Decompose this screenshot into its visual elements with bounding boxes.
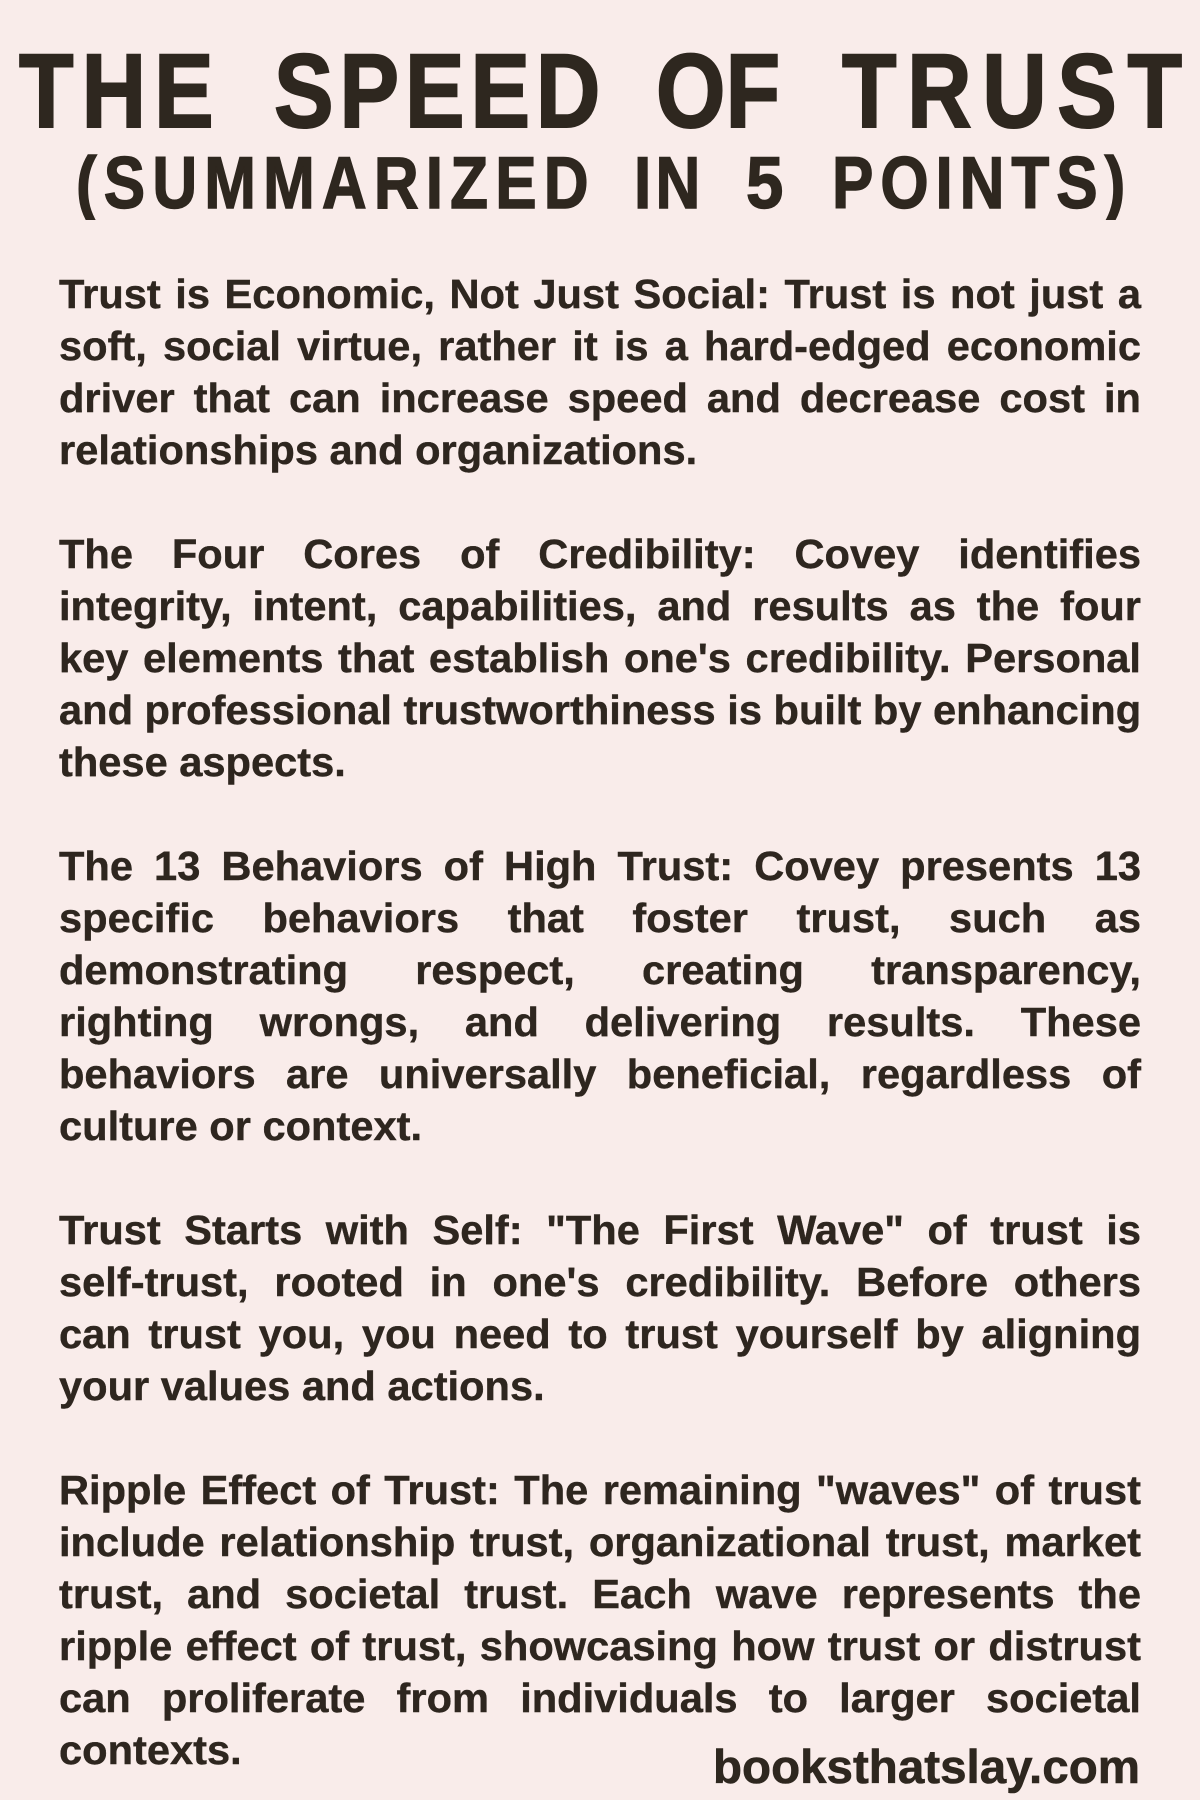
point 4: trust starts with self: Trust Starts with Self: "The First Wave" of trust is xyxy=(59,1207,1141,1253)
point 1: trust is economic xyxy=(59,271,1142,473)
body text xyxy=(59,271,1142,1773)
title xyxy=(19,32,1182,135)
point 5: ripple effect of trust: can proliferate from individuals to larger societal xyxy=(59,1675,1141,1721)
point 2: four cores of credibility: integrity, intent, capabilities, and results as the four xyxy=(59,583,1141,629)
point 3: 13 behaviors of high trust: demonstrating respect, creating transparency, xyxy=(59,947,1141,993)
point 2: four cores of credibility: The Four Cores of Credibility: Covey identifies xyxy=(59,531,1141,577)
point 1: trust is economic: soft, social virtue, rather it is a hard-edged economic xyxy=(59,323,1141,369)
subtitle xyxy=(76,142,1125,220)
point 5: ripple effect of trust: include relationship trust, organizational trust, market xyxy=(59,1519,1141,1565)
point 3: 13 behaviors of high trust: specific behaviors that foster trust, such as xyxy=(59,895,1141,941)
point 3: 13 behaviors of high trust: behaviors are universally beneficial, regardless of xyxy=(59,1051,1141,1097)
point 1: trust is economic: Trust is Economic, Not Just Social: Trust is not just a xyxy=(59,271,1141,317)
website credit: booksthatslay.com xyxy=(713,1740,1140,1793)
point 2: four cores of credibility xyxy=(59,531,1141,785)
point 4: trust starts with self: your values and actions. xyxy=(59,1363,545,1409)
point 5: ripple effect of trust: trust, and societal trust. Each wave represents the xyxy=(59,1571,1141,1617)
point 2: four cores of credibility: these aspects. xyxy=(59,739,346,785)
point 4: trust starts with self: self-trust, rooted in one's credibility. Before others xyxy=(59,1259,1141,1305)
point 1: trust is economic: driver that can increase speed and decrease cost in xyxy=(59,375,1141,421)
point 4: trust starts with self xyxy=(59,1207,1141,1409)
point 5: ripple effect of trust: ripple effect of trust, showcasing how trust or distrust xyxy=(59,1623,1141,1669)
point 1: trust is economic: relationships and organizations. xyxy=(59,427,697,473)
point 2: four cores of credibility: key elements that establish one's credibility. Personal xyxy=(59,635,1141,681)
point 2: four cores of credibility: and professional trustworthiness is built by enhancing xyxy=(59,687,1141,733)
point 3: 13 behaviors of high trust: culture or context. xyxy=(59,1103,422,1149)
point 3: 13 behaviors of high trust: righting wrongs, and delivering results. These xyxy=(59,999,1141,1045)
point 3: 13 behaviors of high trust: The 13 Behaviors of High Trust: Covey presents 13 xyxy=(59,843,1141,889)
point 5: ripple effect of trust xyxy=(59,1467,1141,1773)
point 5: ripple effect of trust: Ripple Effect of Trust: The remaining "waves" of trust xyxy=(59,1467,1141,1513)
point 4: trust starts with self: can trust you, you need to trust yourself by aligning xyxy=(59,1311,1141,1357)
point 5: ripple effect of trust: contexts. xyxy=(59,1727,242,1773)
point 3: 13 behaviors of high trust xyxy=(59,843,1142,1149)
